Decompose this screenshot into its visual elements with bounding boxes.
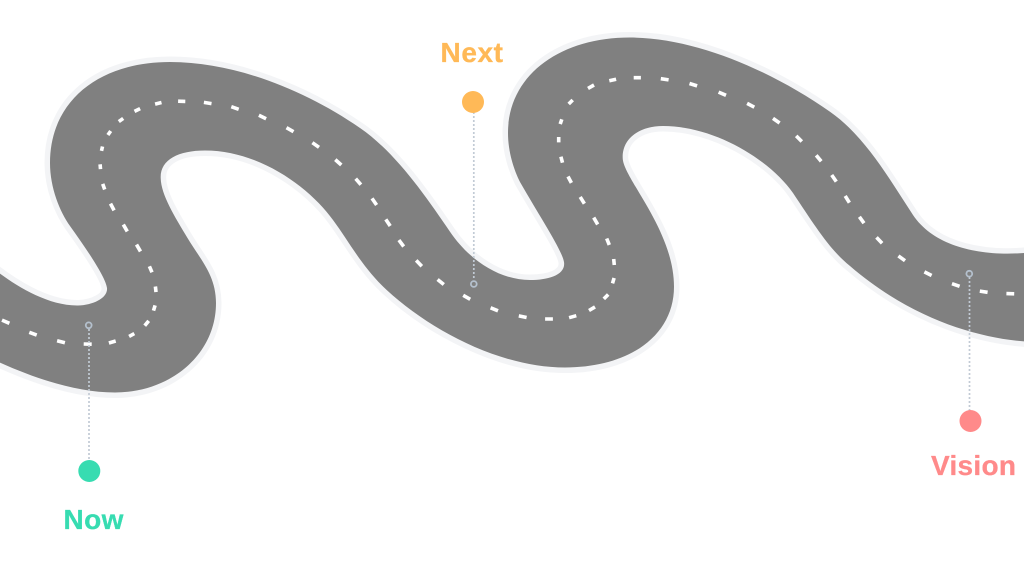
connector line [88,329,90,461]
connector line [968,277,970,411]
dot [78,460,100,482]
dot [462,91,484,113]
milestone: Next [440,37,504,287]
milestone: Now [64,322,124,535]
label: Next [440,37,504,68]
connector line [473,112,475,280]
winding road [0,38,1024,392]
road pin [471,281,477,287]
label: Vision [931,450,1016,481]
milestone: Vision [931,271,1016,481]
dot [960,410,982,432]
road surface with light edge [0,38,1024,392]
road pin [86,322,92,328]
label: Now [64,504,124,535]
road pin [966,271,972,277]
dashed lane markings [2,78,1014,344]
